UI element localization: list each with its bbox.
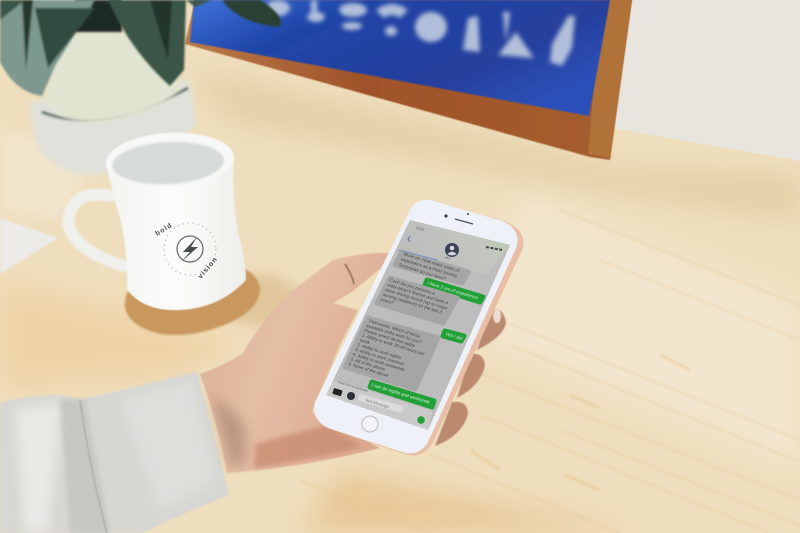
keyboard bar [326,381,432,430]
plant [0,0,281,175]
cuff highlight [132,391,205,497]
palm and thumb [200,253,388,473]
message 3: 1. Ability to work 30-40 hours per [361,333,426,356]
coaster [125,268,300,335]
poster icons [266,0,575,66]
framed blue poster [185,0,632,160]
reply 2: Yes I do! [445,331,464,341]
apps icon [347,392,355,400]
message 3: 4. Ability to work weekends [352,352,406,372]
message 3: 5. All of the above [350,357,386,372]
palm shadow [254,424,362,468]
send button [417,416,425,424]
contact avatar: Jobs [444,255,451,261]
header divider [398,250,438,260]
message 1: Technician do you have? [398,262,447,281]
home button [362,416,378,432]
speaker and camera [444,213,473,224]
leaves [0,0,281,96]
mug opening [111,139,225,187]
mug rim [105,130,235,190]
mug body [106,160,246,310]
message 3 [345,318,438,389]
coffee mug [68,130,246,310]
wrist shadow [212,395,246,468]
message 1: Move on: How many years of [403,251,460,273]
saucer shadow ring [42,88,188,120]
mug logo: vision [197,256,219,280]
hand [200,253,506,473]
reply 1: I have 3 yrs of experience [427,280,479,300]
thumb crease [345,264,354,284]
header band [400,220,510,275]
message 3: 2. Ability to work nights [356,342,403,360]
message 3: 6. None of the above [348,361,390,378]
message 2: years? [380,297,395,305]
camera icon [332,388,343,396]
message 3: Please select all that apply. [363,328,417,348]
message 3: week [359,337,372,345]
message 1 [395,251,468,284]
reply 3: I can do nights and weekends [371,382,431,405]
ring finger [435,402,468,446]
sleeve shadow [60,400,110,533]
saucer [30,80,196,175]
middle finger [457,354,485,398]
back arrow [408,236,410,242]
time: 9:32 [416,225,425,232]
message 3: 3. Ability to work overtime [354,347,405,367]
mug logo [154,222,219,280]
message 1: experience as a Field Service [400,257,459,279]
keyboard bar: Reply STOP to unsubscribe [338,381,369,393]
smartphone [314,200,523,455]
status icons [486,247,502,250]
wood grain [300,210,800,533]
dark gap between leaves [75,0,122,32]
blurred far table edge [190,70,800,220]
paper at the left edge [0,218,58,274]
wall [612,0,800,161]
message 3: available shifts work for you? [365,323,423,345]
phone body [314,200,517,453]
message 2 [377,277,457,323]
warm band left [0,280,240,390]
message 2: moving violations) for the last 3 [382,292,443,315]
screen [326,220,510,430]
light band on the right [480,190,800,470]
rose gold edge [315,200,523,455]
mug logo: bold [154,222,174,238]
fingertip highlight [493,309,501,323]
keyboard bar: Text Message [365,397,391,409]
message 3: That works. Which of these [368,318,421,339]
sleeve cuff seam [80,400,107,533]
message field [362,398,400,409]
sleeve [0,372,229,533]
pot [45,32,182,122]
sleeve highlight [15,402,62,533]
blue poster [190,0,610,116]
wooden frame [185,0,632,160]
index finger [477,310,506,350]
warm band lower left [300,470,640,533]
message 2: Cool! Do you possess a [389,277,436,296]
message 2: clean driving record (eg no major [384,287,449,311]
mug handle [68,194,124,266]
contact avatar [444,243,459,261]
message 2: valid driver's license and have a [386,282,450,305]
